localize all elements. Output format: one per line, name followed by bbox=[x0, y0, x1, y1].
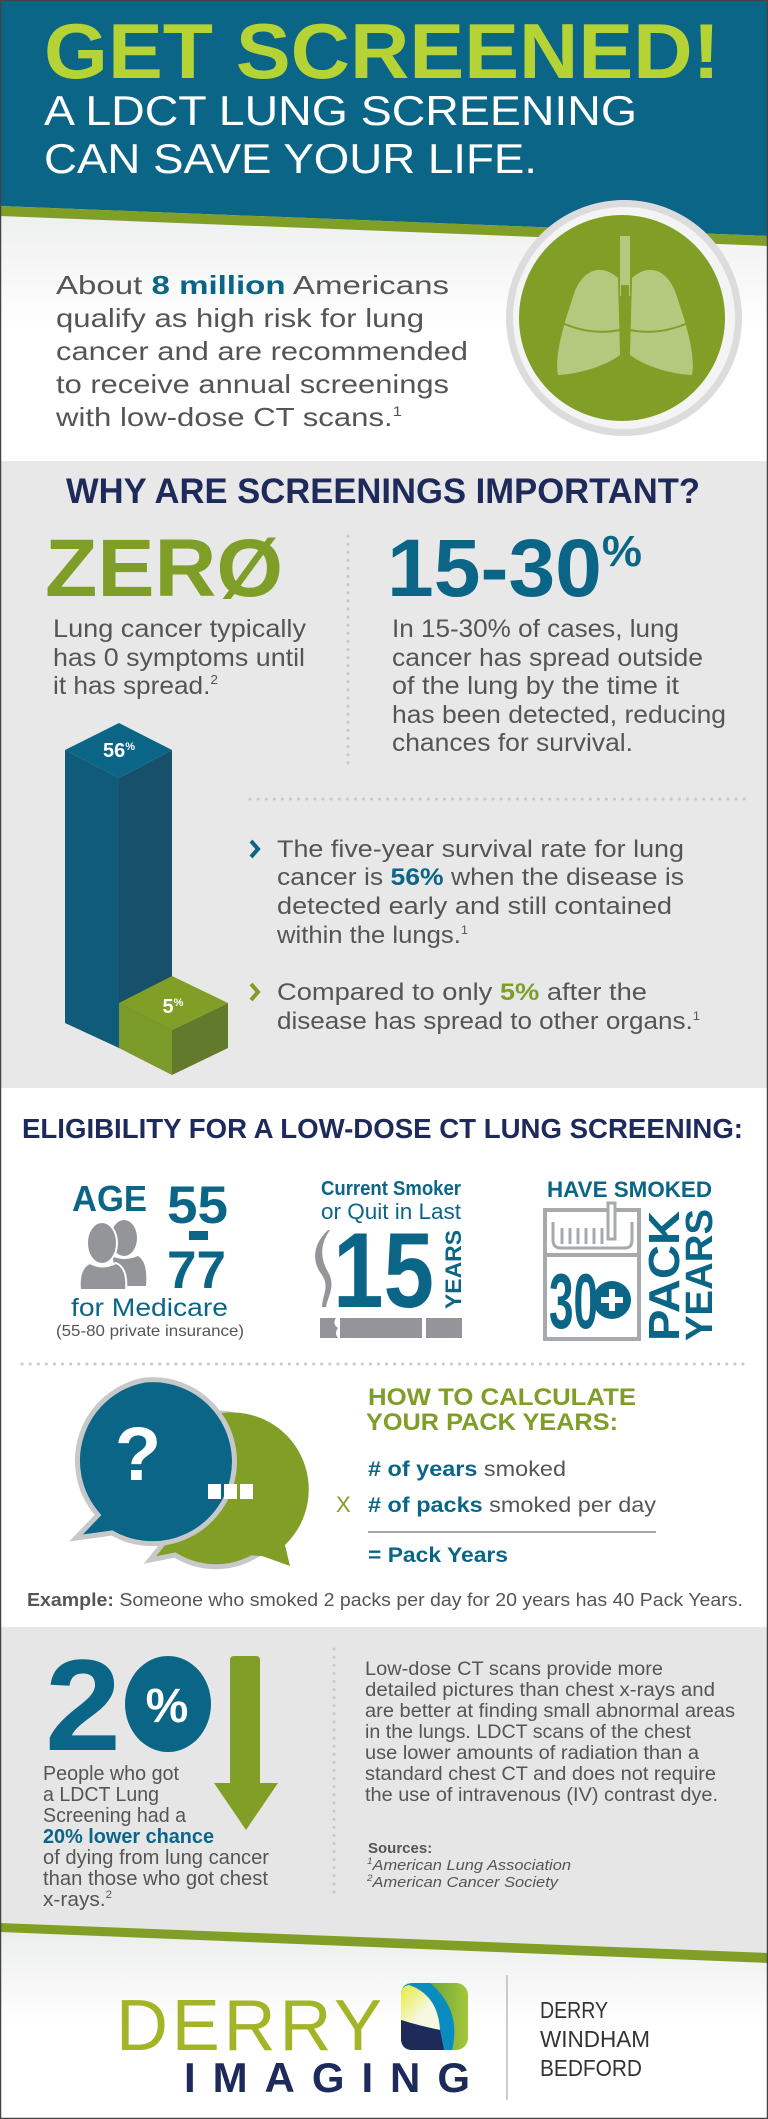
text: 15-30%: chances for survival. bbox=[392, 729, 633, 757]
subtitle bbox=[44, 87, 637, 182]
stat: 15-30%: 15-30 bbox=[387, 523, 597, 614]
intro paragraph: 1 bbox=[393, 403, 402, 419]
text: 15-30% bbox=[392, 615, 726, 757]
text: LDCT description: are better at finding small abnormal areas bbox=[365, 1701, 735, 1722]
intro area background bbox=[0, 200, 768, 461]
heading: eligibility: ELIGIBILITY FOR A LOW-DOSE CT LUNG SCREENING: bbox=[22, 1113, 743, 1144]
bullet: 5%: 1 bbox=[693, 1009, 700, 1023]
eligibility: age: (55-80 private insurance) bbox=[56, 1323, 244, 1340]
panel: why screenings important bbox=[0, 461, 768, 1088]
icon: logo mark bbox=[401, 1983, 468, 2050]
text: LDCT description bbox=[365, 1659, 735, 1806]
subtitle: A LDCT LUNG SCREENING bbox=[44, 87, 637, 134]
text: zero: has 0 symptoms until bbox=[53, 644, 305, 672]
locations bbox=[540, 1997, 650, 2081]
eligibility: age bbox=[56, 1176, 244, 1340]
eligibility: 30+ pack years: YEARS bbox=[679, 1209, 721, 1341]
bullet: 56% bbox=[251, 836, 684, 949]
bullet: 56%: detected early and still contained bbox=[277, 893, 672, 920]
sources: Sources: bbox=[368, 1840, 432, 1857]
text: zero: Lung cancer typically bbox=[53, 615, 307, 643]
intro paragraph bbox=[55, 270, 468, 432]
heading: why: WHY ARE SCREENINGS IMPORTANT? bbox=[66, 472, 700, 511]
logo: derry imaging: IMAGING bbox=[184, 2054, 470, 2101]
footer stripe bbox=[0, 1923, 768, 1963]
icon: people bbox=[80, 1220, 146, 1290]
chart: 3d bars: % bbox=[174, 997, 184, 1009]
eligibility: smoker 15 years: Current Smoker bbox=[321, 1178, 461, 1200]
heading: how to calculate: YOUR PACK YEARS: bbox=[366, 1409, 618, 1436]
text: LDCT description: standard chest CT and does not require bbox=[365, 1764, 716, 1785]
text: LDCT description: Low-dose CT scans provide more bbox=[365, 1659, 663, 1680]
eligibility: smoker 15 years: or Quit in Last bbox=[321, 1199, 461, 1224]
eligibility: age: 77 bbox=[167, 1241, 226, 1300]
text: 20% lower chance: x-rays. bbox=[43, 1889, 103, 1911]
sources: 2 bbox=[366, 1873, 372, 1883]
sources: 1 bbox=[367, 1856, 372, 1866]
stat: 20%: 2 bbox=[45, 1632, 121, 1778]
formula bbox=[336, 1458, 657, 1567]
intro paragraph: cancer and are recommended bbox=[56, 336, 468, 366]
bullet: 5%: Compared to only 5% after the bbox=[277, 979, 647, 1006]
heading: how to calculate: HOW TO CALCULATE bbox=[368, 1384, 636, 1411]
text: zero: it has spread. bbox=[53, 672, 203, 700]
header banner bbox=[0, 0, 768, 246]
bullet: 5%: disease has spread to other organs. bbox=[277, 1008, 660, 1035]
text: 15-30%: of the lung by the time it bbox=[392, 672, 679, 700]
bullet: 56%: within the lungs. bbox=[277, 922, 449, 949]
text: zero: 2 bbox=[210, 672, 218, 687]
logo: derry imaging: DERRY bbox=[116, 1986, 382, 2066]
text: 20% lower chance: Screening had a bbox=[43, 1805, 187, 1827]
icon: cigarette bbox=[320, 1318, 462, 1338]
eligibility: age: for Medicare bbox=[71, 1294, 228, 1322]
text: 20% lower chance: People who got bbox=[43, 1763, 179, 1785]
text: 20% lower chance: 2 bbox=[106, 1889, 112, 1901]
eligibility: age: AGE bbox=[72, 1178, 147, 1219]
intro paragraph: About 8 million Americans bbox=[56, 270, 449, 300]
bullet: 5% bbox=[251, 979, 700, 1035]
stat: zero: ZERØ bbox=[45, 523, 283, 614]
intro paragraph: qualify as high risk for lung bbox=[56, 303, 424, 333]
intro paragraph: with low-dose CT scans. bbox=[56, 402, 337, 432]
stat: 20% bbox=[45, 1632, 211, 1778]
eligibility: 30+ pack years: PACK bbox=[640, 1211, 689, 1341]
text: zero bbox=[53, 615, 307, 700]
logo: derry imaging bbox=[116, 1983, 470, 2101]
sources: American Cancer Society bbox=[371, 1874, 560, 1891]
text: 15-30%: cancer has spread outside bbox=[392, 644, 703, 672]
locations: WINDHAM bbox=[540, 2026, 650, 2052]
intro paragraph: to receive annual screenings bbox=[56, 369, 449, 399]
text: 20% lower chance: a LDCT Lung bbox=[43, 1784, 159, 1806]
text: LDCT description: in the lungs. LDCT scans of the chest bbox=[365, 1722, 692, 1743]
panel: 20% lower chance bbox=[0, 1627, 768, 2119]
text: 20% lower chance bbox=[43, 1763, 269, 1911]
eligibility: smoker 15 years: YEARS bbox=[441, 1230, 466, 1309]
eligibility: 30+ pack years: 30 bbox=[549, 1257, 598, 1345]
eligibility: age: 55 bbox=[167, 1176, 228, 1235]
chart: 3d bars bbox=[65, 723, 228, 1075]
text: 20% lower chance: 20% lower chance bbox=[43, 1826, 214, 1848]
heading: how to calculate bbox=[366, 1384, 636, 1436]
bullet: 56%: The five-year survival rate for lung bbox=[277, 836, 684, 863]
stat: 20%: % bbox=[146, 1680, 188, 1733]
bullet: 56%: cancer is 56% when the disease is bbox=[277, 864, 684, 891]
sources: American Lung Association bbox=[371, 1857, 571, 1874]
icon: speech bubbles: ? bbox=[115, 1412, 161, 1497]
icon: cigarette pack bbox=[545, 1203, 639, 1339]
eligibility: smoker 15 years bbox=[315, 1178, 466, 1338]
icon: lungs circle bbox=[506, 200, 742, 436]
eligibility: 30+ pack years bbox=[545, 1177, 721, 1345]
formula: # of packs smoked per day bbox=[368, 1494, 657, 1517]
chart: 3d bars: 5 bbox=[163, 996, 174, 1018]
eligibility: 30+ pack years: HAVE SMOKED bbox=[547, 1177, 712, 1202]
chart: 3d bars: 56 bbox=[103, 740, 125, 762]
chart: 3d bars: % bbox=[125, 741, 135, 753]
icon: down arrow bbox=[214, 1656, 278, 1830]
locations: BEDFORD bbox=[540, 2055, 642, 2081]
text: 20% lower chance: than those who got chest bbox=[43, 1868, 268, 1890]
stat: 15-30%: % bbox=[602, 527, 642, 576]
text: LDCT description: use lower amounts of radiation than a bbox=[365, 1743, 699, 1764]
sources bbox=[366, 1840, 571, 1891]
formula: # of years smoked bbox=[368, 1458, 566, 1481]
formula: X bbox=[336, 1492, 351, 1517]
text: 15-30%: has been detected, reducing bbox=[392, 701, 726, 729]
example text: Example: Someone who smoked 2 packs per day for 20 years has 40 Pack Years. bbox=[27, 1590, 743, 1610]
title: GET SCREENED! bbox=[44, 7, 720, 95]
formula: = Pack Years bbox=[368, 1544, 508, 1567]
subtitle: CAN SAVE YOUR LIFE. bbox=[44, 135, 537, 182]
text: LDCT description: detailed pictures than chest x-rays and bbox=[365, 1680, 715, 1701]
locations: DERRY bbox=[540, 1997, 608, 2023]
eligibility: smoker 15 years: 15 bbox=[333, 1210, 434, 1330]
text: 20% lower chance: of dying from lung cancer bbox=[43, 1847, 269, 1869]
bullet: 56%: 1 bbox=[461, 923, 468, 937]
text: LDCT description: the use of intravenous (IV) contrast dye. bbox=[365, 1785, 718, 1806]
text: 15-30%: In 15-30% of cases, lung bbox=[392, 615, 679, 643]
icon: speech bubbles bbox=[76, 1380, 309, 1567]
